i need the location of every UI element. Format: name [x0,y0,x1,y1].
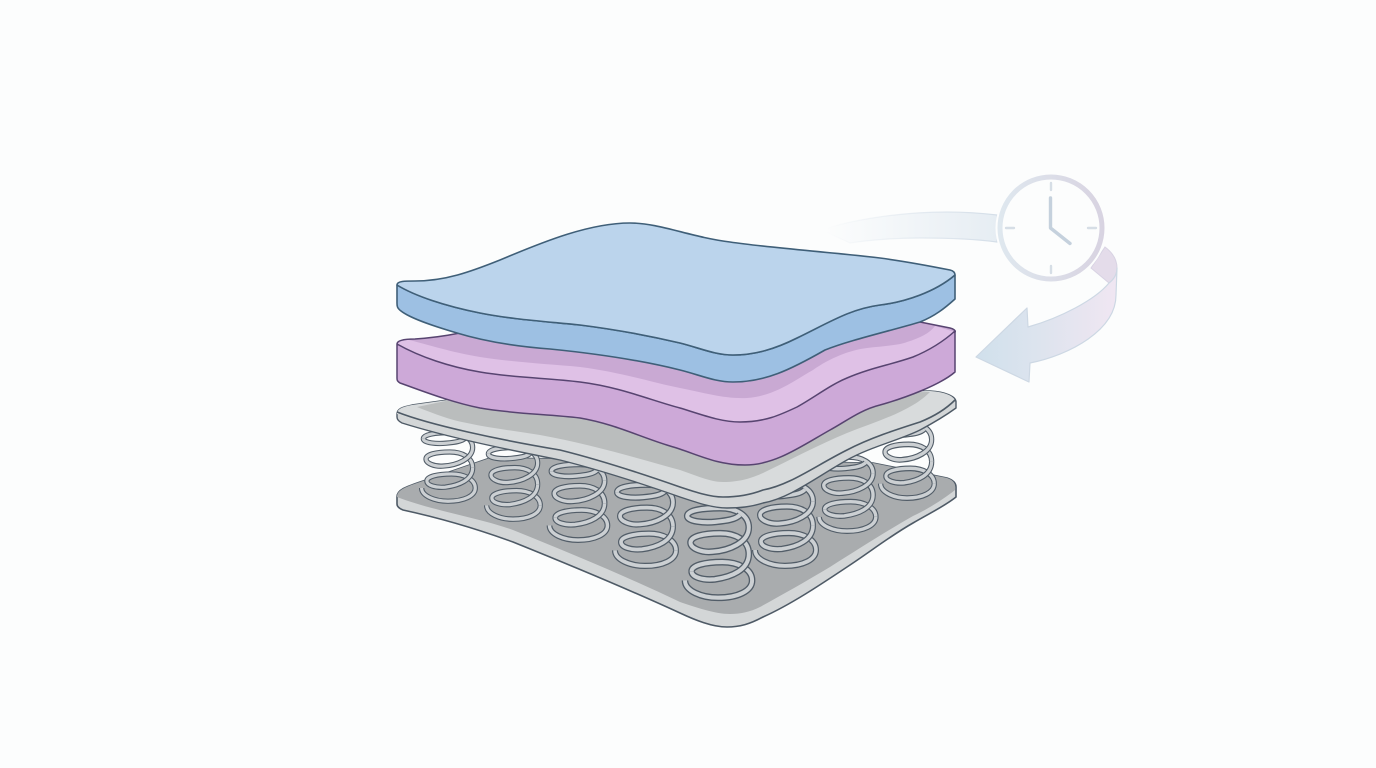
purple top surface [397,322,955,422]
arrow: curved ribbon back to mattress [976,247,1117,382]
blue top surface [397,223,955,355]
spring 3 [550,464,607,540]
spring 7 [819,457,876,531]
arrow: time ribbon into clock [822,212,997,243]
spring 6 [755,483,816,566]
spring 4 [615,485,676,566]
clock hands [1050,198,1070,244]
purple front face [397,331,955,465]
spring 2 [487,447,540,519]
spring 1 [422,433,475,501]
support plate [397,391,956,508]
springs [422,423,934,598]
icon: clock [996,172,1106,284]
arrow body and head [976,268,1117,382]
purple top outline [397,322,955,344]
spring 8 [881,423,934,498]
comfort layer: purple [397,322,955,465]
clock ticks [1006,183,1096,273]
blue front face [397,275,955,382]
purple highlight band [397,326,955,422]
spring 5 [685,508,752,598]
base plate [397,458,956,627]
comfort layer: blue [397,223,955,382]
ribbon fold [1091,247,1117,283]
